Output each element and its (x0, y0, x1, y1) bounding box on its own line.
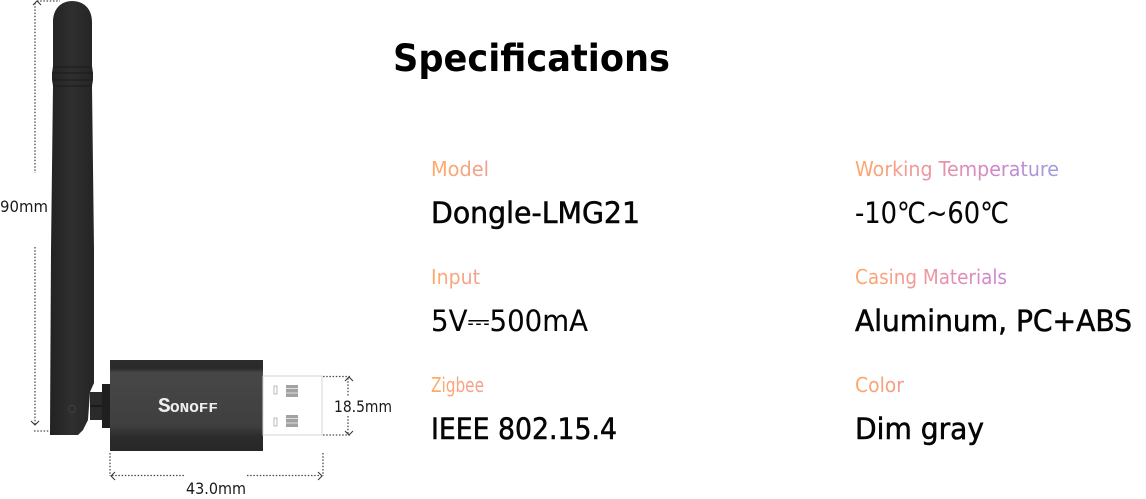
spec: Zigbee: Zigbee (431, 373, 484, 397)
dimension: 18.5mm width: 18.5mm (334, 397, 392, 416)
spec: Color: Color (855, 373, 905, 397)
title: Specifications (393, 37, 670, 80)
spec: Casing Materials: Aluminum, PC+ABS (855, 304, 1132, 338)
spec: Working Temperature: -10℃~60℃ (855, 196, 1009, 230)
spec: Working Temperature (855, 157, 1059, 230)
spec: Zigbee (431, 373, 617, 446)
spec: Model: Model (431, 157, 489, 181)
spec: Input: 5V⎓500mA (431, 304, 588, 338)
dimension: 90mm height: 90mm (0, 197, 48, 216)
USB metal plug (263, 376, 322, 435)
dimension: 43.0mm length (110, 453, 323, 498)
spec: Model: Dongle-LMG21 (431, 196, 640, 230)
spec: Casing Materials (855, 265, 1132, 338)
icon: antenna (50, 1, 94, 435)
icon: antenna connector (90, 384, 110, 428)
spec: Input (431, 265, 588, 338)
product illustration: USB dongle with dimensions (0, 1, 392, 498)
dimension: 43.0mm length: 43.0mm (186, 479, 246, 498)
spec: Color (855, 373, 984, 446)
spec: Model (431, 157, 640, 230)
spec: Working Temperature: Working Temperature (855, 157, 1059, 181)
spec: Input: Input (431, 265, 480, 289)
dimension: 90mm height (0, 1, 60, 431)
dimension: 18.5mm width (323, 376, 392, 435)
spec: Casing Materials: Casing Materials (855, 265, 1007, 289)
spec: Zigbee: IEEE 802.15.4 (431, 412, 617, 446)
USB dongle body (110, 360, 263, 451)
spec: Color: Dim gray (855, 412, 984, 446)
logo: SONOFF wordmark: S (158, 396, 171, 419)
logo: SONOFF wordmark: ONOFF (170, 401, 218, 417)
